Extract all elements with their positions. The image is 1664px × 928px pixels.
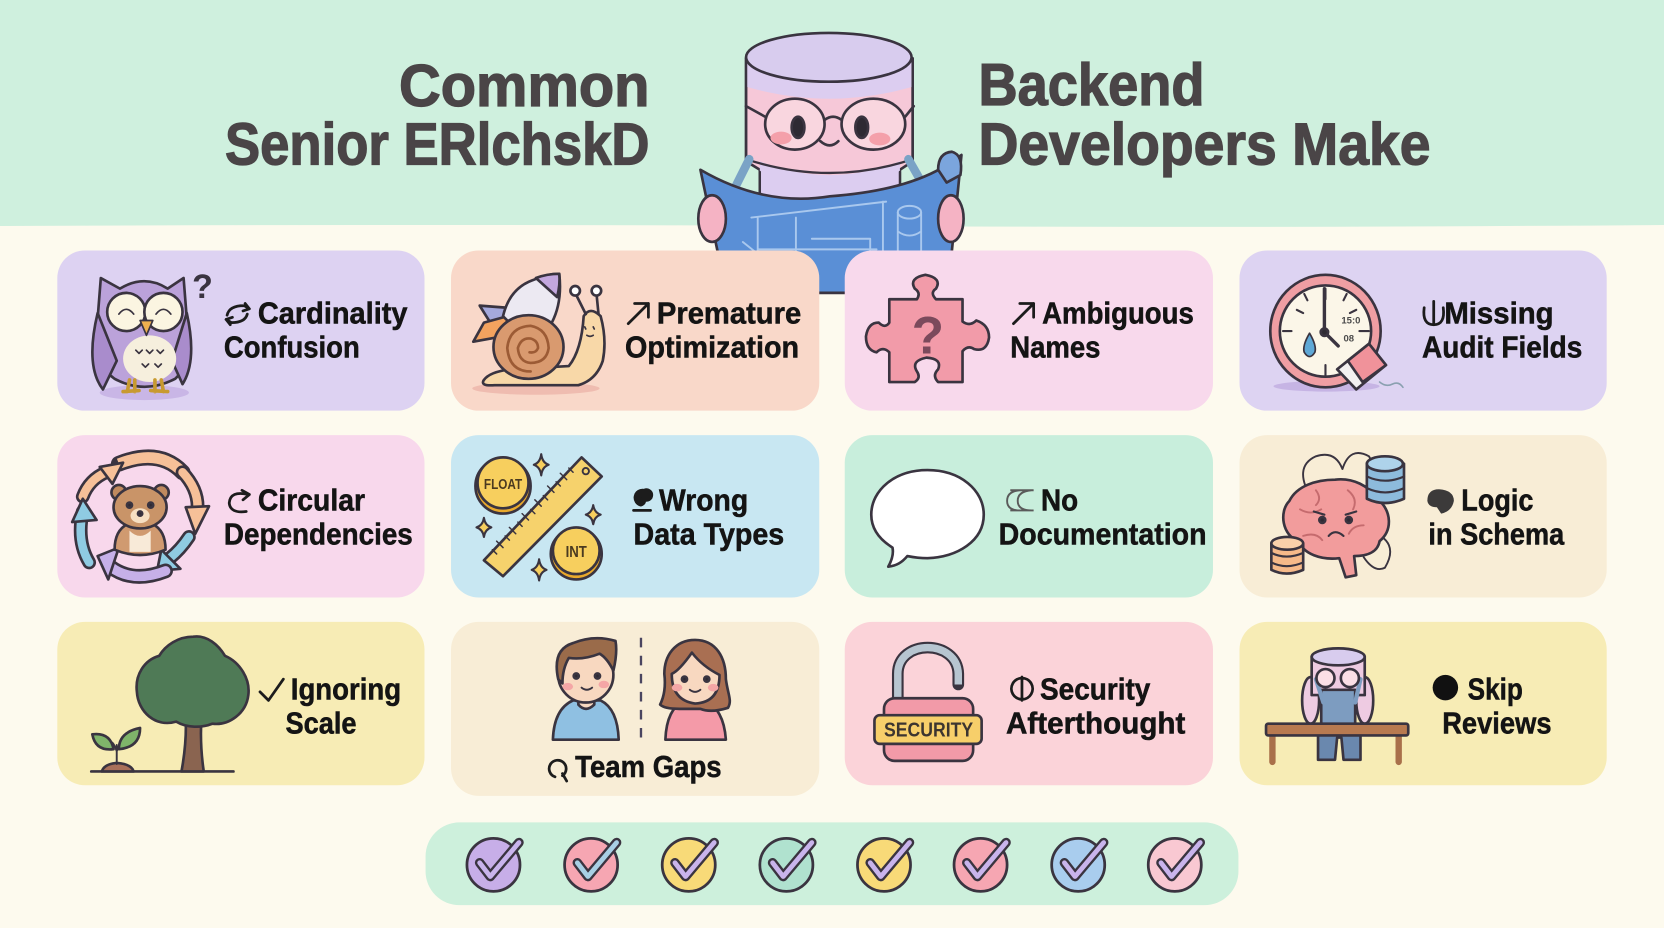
check 6 bbox=[954, 838, 1007, 891]
label bbox=[224, 482, 413, 551]
icon: brain with databases bbox=[1271, 453, 1404, 577]
icon: small brain bbox=[1427, 489, 1454, 514]
check 8 bbox=[1148, 838, 1201, 891]
card: Security Afterthought bbox=[845, 622, 1213, 785]
label: Optimization bbox=[625, 330, 799, 365]
check 2 bbox=[565, 838, 618, 891]
card: Missing Audit Fields bbox=[1240, 250, 1607, 411]
icon: tree and sprout bbox=[91, 636, 249, 771]
label: Dependencies bbox=[224, 516, 413, 551]
title right bbox=[978, 51, 1431, 177]
label bbox=[1442, 671, 1552, 740]
icon: INT coin bbox=[551, 527, 602, 579]
question mark: ? bbox=[912, 306, 944, 365]
label bbox=[1010, 296, 1194, 365]
icon: check arrow bbox=[260, 679, 283, 700]
label: Ambiguous bbox=[1042, 296, 1194, 331]
check 5 bbox=[857, 838, 911, 891]
label bbox=[1428, 482, 1565, 551]
card: Ambiguous Names bbox=[845, 250, 1213, 411]
title left: Common bbox=[399, 52, 649, 119]
check 1 bbox=[467, 838, 520, 891]
label bbox=[1006, 671, 1185, 740]
label: Confusion bbox=[224, 330, 360, 365]
label: Circular bbox=[258, 482, 365, 517]
icon: FLOAT coin bbox=[475, 457, 531, 514]
label bbox=[999, 482, 1207, 551]
label bbox=[285, 671, 401, 740]
title right: Developers Make bbox=[978, 110, 1431, 177]
icon: rocket snail bbox=[472, 274, 604, 395]
icon: boy bbox=[553, 638, 619, 740]
icon: pin bbox=[634, 490, 652, 510]
icon: clock and eraser: 15:0 bbox=[1341, 316, 1360, 327]
label: Reviews bbox=[1442, 705, 1552, 740]
icon: cycle arrows bbox=[226, 303, 249, 325]
icon: FLOAT coin: FLOAT bbox=[484, 477, 522, 493]
label bbox=[634, 482, 784, 551]
icon: puzzle piece bbox=[866, 275, 989, 382]
icon: question mark: ? bbox=[192, 268, 213, 306]
label: Names bbox=[1010, 330, 1100, 365]
label: Premature bbox=[657, 296, 801, 331]
icon: girl bbox=[660, 640, 730, 740]
icon: clock and eraser: 08 bbox=[1344, 334, 1355, 345]
icon: arrow bbox=[1013, 303, 1034, 324]
icon: empty speech bubble bbox=[871, 470, 984, 567]
label bbox=[1422, 296, 1582, 365]
icon: open padlock bbox=[874, 648, 982, 761]
icon: mascot sitting at bench bbox=[1266, 648, 1408, 762]
divider dashed bbox=[640, 638, 642, 740]
label: Data Types bbox=[634, 516, 784, 551]
label: Ignoring bbox=[291, 671, 401, 706]
check 3 bbox=[662, 838, 715, 891]
icon: magnifier bbox=[549, 760, 567, 781]
card: Wrong Data Types bbox=[451, 435, 819, 597]
icon: bear in cycle arrows bbox=[72, 457, 209, 579]
label: Wrong bbox=[659, 482, 748, 517]
label bbox=[224, 296, 408, 365]
card: Ignoring Scale bbox=[57, 622, 424, 785]
icon: anchor symbol bbox=[1424, 301, 1444, 325]
icon: power symbol bbox=[1011, 677, 1033, 700]
header band bbox=[0, 0, 1664, 227]
label: No bbox=[1041, 482, 1078, 517]
label: Scale bbox=[285, 705, 357, 740]
icon: owl bbox=[92, 278, 191, 400]
card: Cardinality Confusion bbox=[57, 250, 424, 411]
icon: loop arrow bbox=[229, 490, 249, 512]
icon: INT coin: INT bbox=[566, 544, 587, 561]
label: Skip bbox=[1468, 671, 1523, 706]
label: Missing bbox=[1444, 296, 1554, 331]
icon: arrow bbox=[628, 303, 648, 324]
label: Afterthought bbox=[1006, 705, 1185, 740]
icon: open padlock: SECURITY bbox=[884, 719, 974, 741]
title left bbox=[225, 52, 649, 177]
label: Cardinality bbox=[258, 296, 408, 331]
label: Audit Fields bbox=[1422, 330, 1582, 365]
card: Logic in Schema bbox=[1240, 435, 1607, 597]
card: Circular Dependencies bbox=[57, 435, 424, 597]
label: Documentation bbox=[999, 516, 1207, 551]
label: Logic bbox=[1461, 482, 1533, 517]
checklist bar bbox=[426, 822, 1238, 905]
card: Team Gaps bbox=[451, 622, 819, 796]
sparkles bbox=[476, 454, 601, 580]
icon: black dot bbox=[1433, 675, 1458, 700]
icon: overlapping circles bbox=[1007, 490, 1034, 510]
check 7 bbox=[1052, 838, 1105, 891]
card: Premature Optimization bbox=[451, 250, 819, 411]
title left: Senior ERlchskD bbox=[225, 110, 649, 177]
label: Team Gaps bbox=[575, 749, 722, 784]
label bbox=[625, 296, 801, 365]
label: in Schema bbox=[1428, 516, 1565, 551]
icon: ruler bbox=[484, 457, 602, 576]
card: Skip Reviews bbox=[1240, 622, 1607, 785]
label: Security bbox=[1040, 671, 1150, 706]
icon: clock and eraser bbox=[1270, 275, 1403, 392]
title right: Backend bbox=[978, 51, 1204, 118]
mascot: database character reading blueprint bbox=[698, 33, 964, 293]
check 4 bbox=[760, 838, 813, 891]
card: No Documentation bbox=[845, 435, 1213, 597]
